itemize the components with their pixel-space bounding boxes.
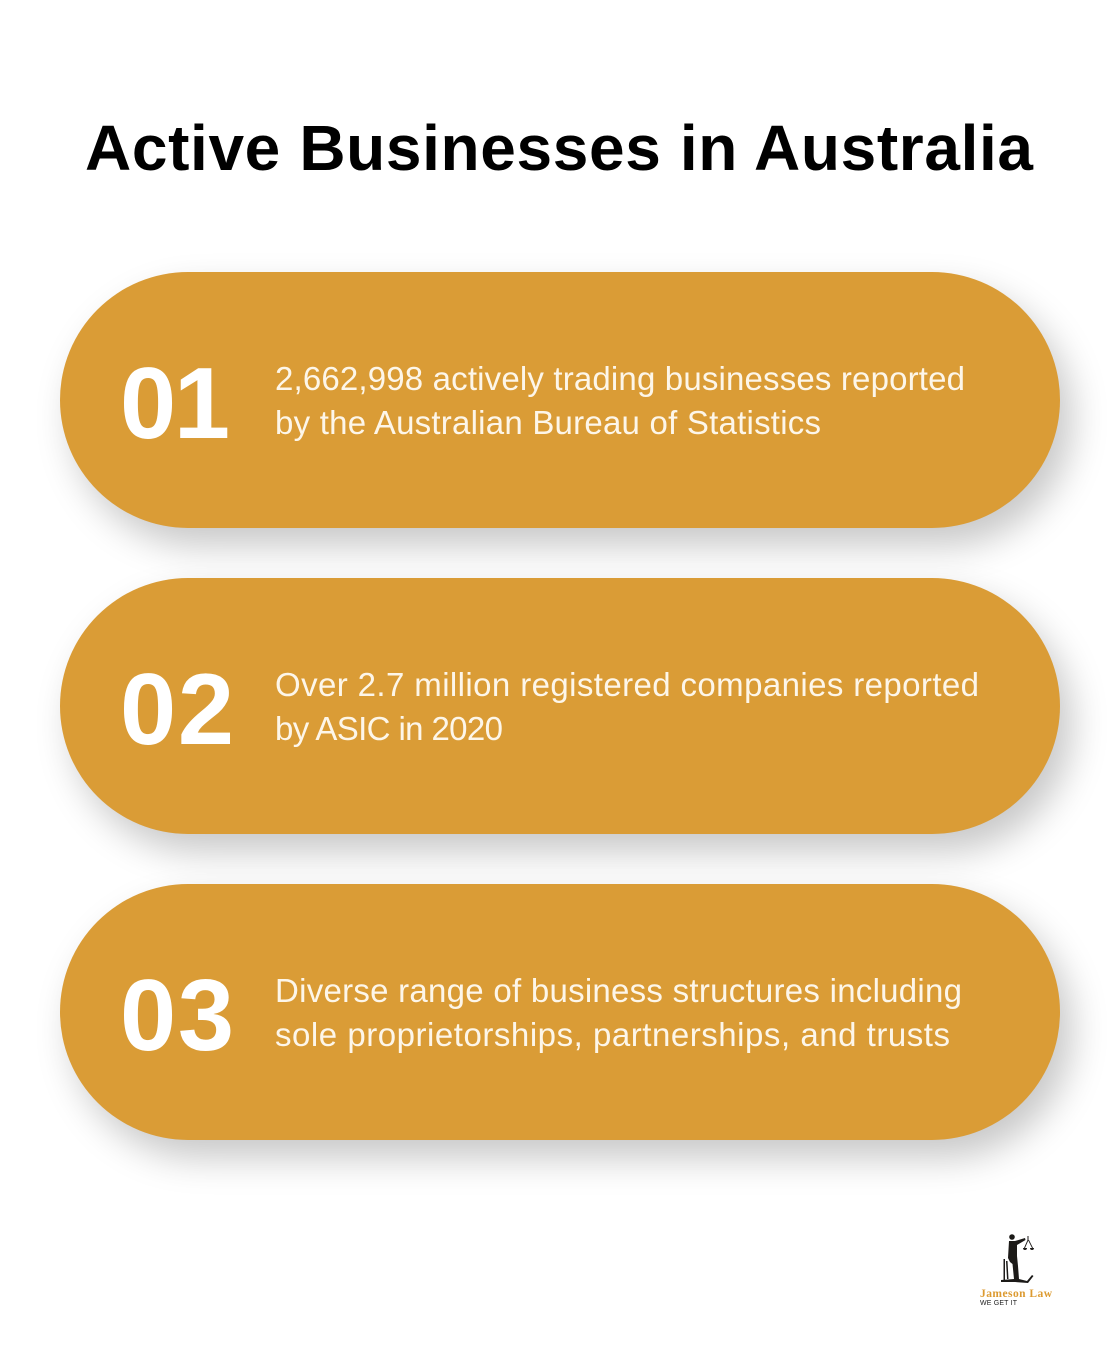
item 1 content	[120, 348, 965, 460]
description 1	[275, 360, 965, 441]
description 1: by the Australian Bureau of Statistics	[275, 404, 821, 441]
description 3: sole proprietorships, partnerships, and trusts	[275, 1016, 950, 1053]
number 03: 03	[120, 960, 234, 1072]
panel: item 2 background	[60, 578, 1060, 834]
item 2 content	[120, 654, 979, 766]
icon: lady justice	[1001, 1234, 1034, 1283]
description 1: 2,662,998 actively trading businesses reported	[275, 360, 965, 397]
description 2: Over 2.7 million registered companies reported	[275, 666, 979, 703]
logo tagline: WE GET IT	[980, 1300, 1018, 1307]
panel: item 1 background	[60, 272, 1060, 528]
logo name: Jameson Law	[980, 1288, 1053, 1300]
title: Active Businesses in Australia	[85, 112, 1033, 184]
description 3: Diverse range of business structures including	[275, 972, 962, 1009]
number 02: 02	[120, 654, 234, 766]
description 2	[275, 666, 979, 747]
logo: Jameson Law	[980, 1234, 1053, 1307]
item 3 content	[120, 960, 962, 1072]
panel: item 3 background	[60, 884, 1060, 1140]
description 3	[275, 972, 962, 1053]
number 01: 01	[120, 348, 230, 460]
description 2: by ASIC in 2020	[275, 710, 503, 747]
